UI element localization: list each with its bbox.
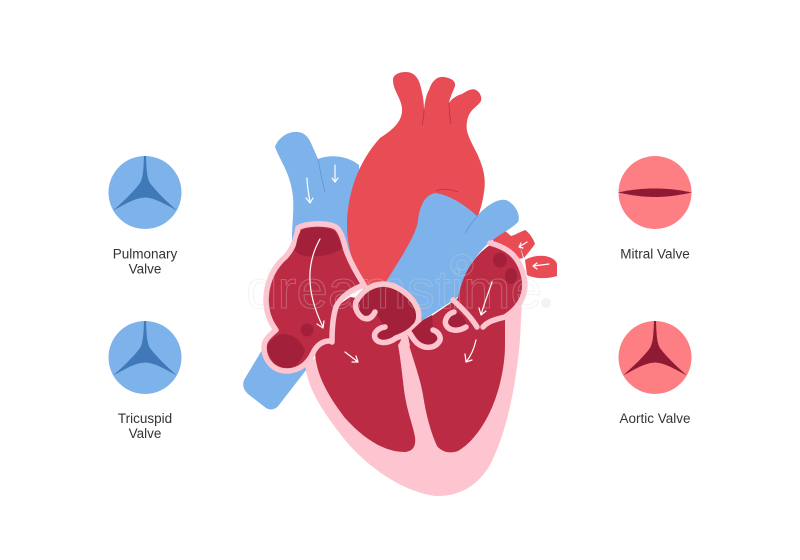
coronary sinus spot bbox=[300, 324, 314, 336]
valve: aortic bbox=[618, 321, 692, 426]
pulmonary veins bbox=[490, 229, 557, 278]
valve: mitral bbox=[618, 156, 692, 262]
right atrium lower dark bbox=[267, 334, 305, 368]
aorta creases bbox=[422, 103, 458, 192]
watermark: dreamstime bbox=[246, 260, 542, 320]
pulmonary artery bbox=[385, 193, 519, 322]
right atrium upper dark bbox=[295, 228, 342, 257]
left ventricle and left atrium cavity bbox=[405, 245, 523, 452]
mitral leaflet band bbox=[453, 300, 477, 327]
mitral curl bbox=[445, 312, 466, 330]
pulmonary artery crease bbox=[465, 216, 478, 234]
valve: tricuspid: Tricuspid bbox=[118, 411, 172, 426]
aortic chamber bbox=[355, 284, 419, 342]
superior vena cava bbox=[275, 132, 365, 290]
valve: aortic: Aortic Valve bbox=[619, 411, 691, 426]
valve: tricuspid: Valve bbox=[129, 426, 161, 441]
heart bbox=[243, 72, 557, 496]
aortic chamber right pocket bbox=[410, 315, 439, 346]
blood flow arrows bbox=[306, 165, 549, 362]
valve: mitral: Mitral Valve bbox=[620, 246, 690, 262]
inferior vena cava bbox=[243, 350, 310, 409]
left atrium wall bbox=[483, 243, 525, 327]
superior vena cava crease bbox=[318, 159, 325, 192]
septum top bbox=[399, 336, 410, 346]
valve: tricuspid bbox=[108, 321, 182, 441]
left atrium dark spots bbox=[493, 252, 507, 268]
right ventricle cavity bbox=[315, 297, 415, 452]
mitral curl pocket bbox=[445, 311, 467, 330]
valve: pulmonary bbox=[108, 156, 182, 276]
aortic curl right bbox=[409, 330, 440, 347]
right atrium bbox=[264, 224, 364, 371]
aorta bbox=[347, 72, 485, 290]
valve: pulmonary: Valve bbox=[129, 262, 161, 276]
ventricle wall bbox=[305, 300, 522, 496]
valve: pulmonary: Pulmonary bbox=[113, 246, 178, 262]
